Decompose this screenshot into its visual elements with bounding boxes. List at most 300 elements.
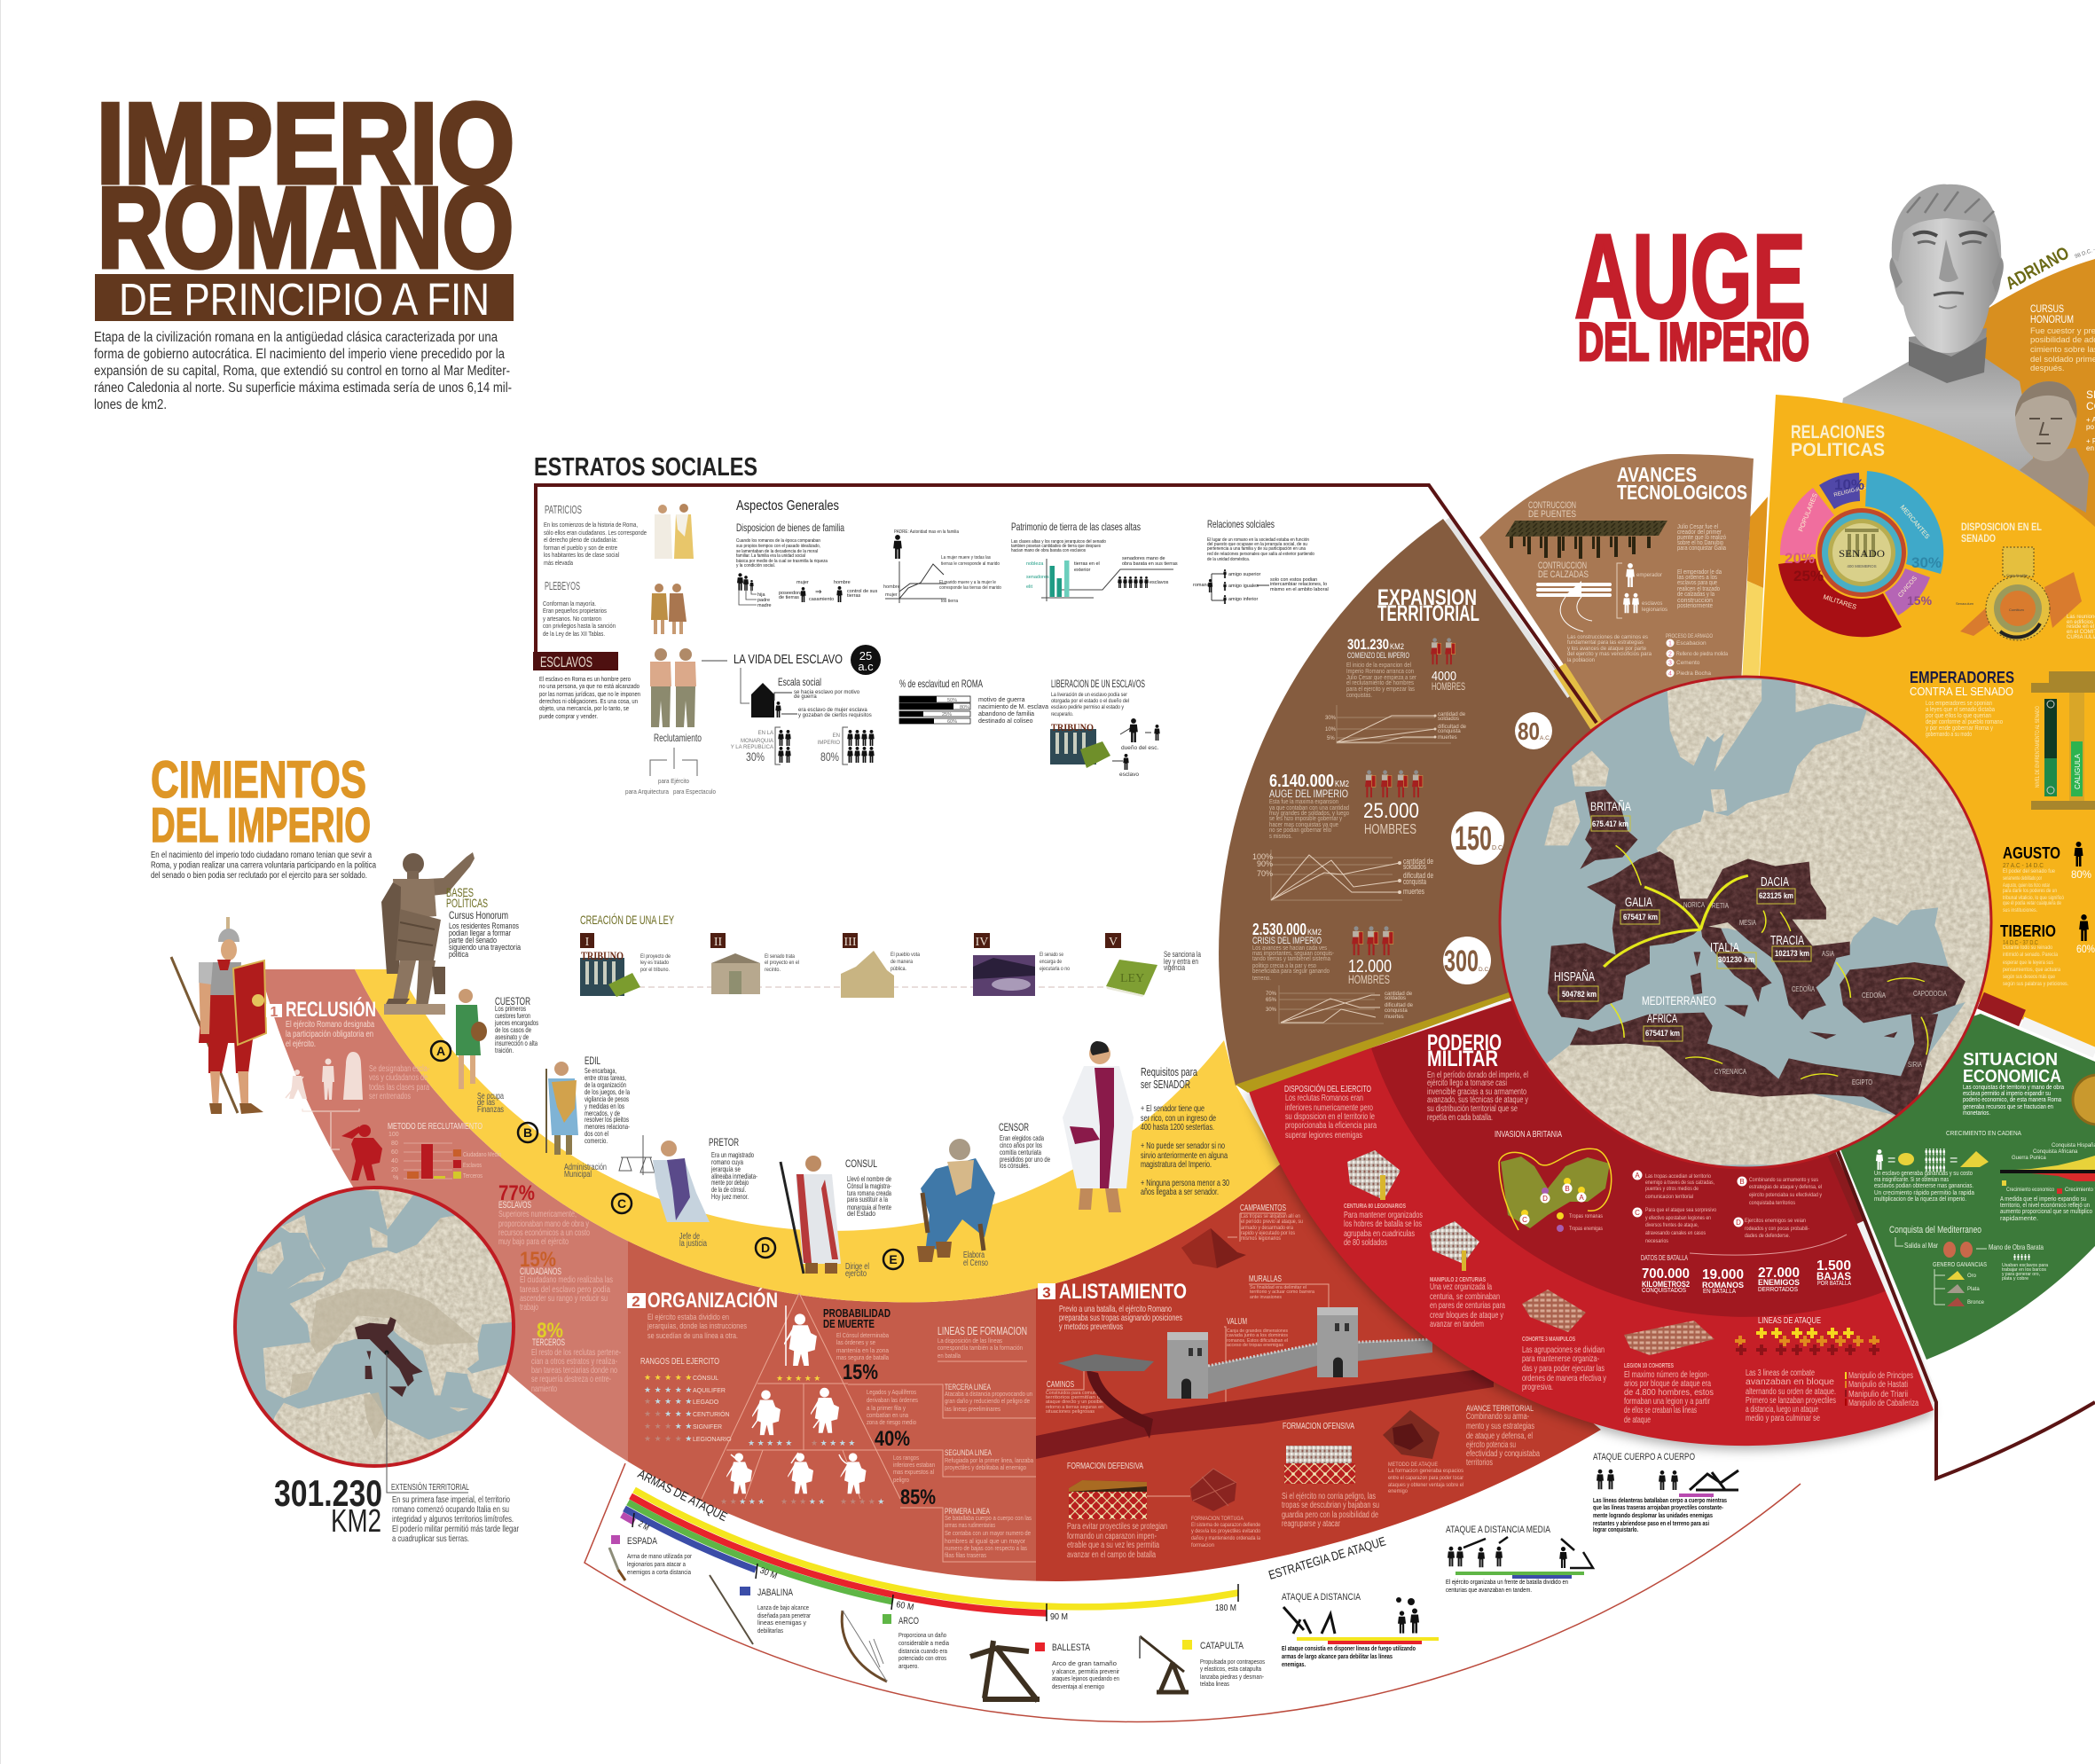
manipulo: centuria, se combinaban <box>1430 1291 1500 1302</box>
avance territorial: efectividad y conquistaba <box>1466 1449 1540 1459</box>
creacion de una ley: vigencia <box>1164 963 1185 972</box>
stage 150 dc: se les hizo imposible gobernar y <box>1269 814 1342 822</box>
legion: de ellos se creaban las lineas <box>1624 1405 1697 1415</box>
pretor: la justicia <box>679 1239 707 1249</box>
plebeyos: y artesanos. No contaron <box>543 615 601 623</box>
manipulo: Una vez organizada la <box>1430 1282 1492 1292</box>
chart: metodo de reclutamiento: 80 <box>391 1141 398 1147</box>
senator: + Ninguna persona menor a 30 <box>1141 1178 1229 1188</box>
formacion defensiva: avanzar en el campo de batalla <box>1067 1550 1156 1560</box>
chart 300 dc: dificultad de <box>1385 1003 1414 1008</box>
ataque a distancia: ATAQUE A DISTANCIA <box>1282 1592 1361 1603</box>
edil: de la organización <box>585 1080 626 1089</box>
jabalina: debilitarlas <box>757 1627 783 1635</box>
formacion defensiva: FORMACION DEFENSIVA <box>1067 1462 1143 1471</box>
disposicion de bienes: sus propios tiempos con el pasado idealizado, <box>736 544 820 549</box>
patricios: el derecho pleno de ciudadanía: <box>544 536 617 544</box>
chart: padre autoridad: tierras le corresponde al marido <box>941 561 1000 567</box>
formacion ofensiva <box>1282 1410 1463 1529</box>
manipulo: MANIPULO 2 CENTURIAS <box>1430 1275 1486 1283</box>
lineas de formacion: Atacaba a distancia propovocando un <box>945 1390 1032 1398</box>
proceso de armado: PROCESO DE ARMADO <box>1666 633 1713 639</box>
heading situacion: esclava permitio al imperio expandir su <box>1963 1091 2051 1097</box>
donut: senado composition: RELIGIOSOS <box>1833 485 1866 498</box>
heading avances: TECNOLOGICOS <box>1617 481 1747 504</box>
disposicion del ejercito: DISPOSICIÓN DEL EJERCITO <box>1284 1083 1371 1094</box>
lineas de formacion: hombres al igual que un mayor <box>945 1537 1025 1545</box>
legion: El maximo número de legion- <box>1624 1369 1709 1380</box>
donut: senado composition: MERCANTES <box>1898 504 1932 540</box>
range ticks <box>632 1513 1238 1622</box>
pyramid of ranks <box>702 1293 900 1507</box>
puentes: Julio Cesar fue el <box>1677 524 1718 530</box>
invasion a britania: INVASION A BRITANIA <box>1495 1130 1562 1140</box>
stage 300 dc: tando tierras y tambienel sistema <box>1252 956 1330 962</box>
extension territorial text: EXTENSIÓN TERRITORIAL <box>391 1481 469 1493</box>
cuestor: Los primeros <box>495 1004 526 1013</box>
espada: enemigos a corta distancia <box>627 1568 692 1576</box>
arco: ARCO <box>898 1616 919 1627</box>
creacion de una ley: El senado trata <box>765 953 795 960</box>
ataque a distancia media: centurias que avanzaban en tandem. <box>1446 1586 1532 1594</box>
main map of the empire <box>1499 676 1992 1169</box>
donut: senado composition: 30% <box>1911 554 1942 571</box>
arco: distancia cuando era <box>898 1647 948 1655</box>
rangos del ejercito: ★★★★★ <box>644 1410 695 1419</box>
edil: comercio. <box>585 1136 608 1145</box>
invasion a britania: Tropas enemigas <box>1569 1226 1604 1232</box>
stat: 301.230 km2: 301.230 <box>274 1472 382 1514</box>
rangos del ejercito: AQUILIFER <box>693 1388 726 1394</box>
patricios: En los comienzos de la historia de Roma, <box>544 521 638 529</box>
tiberio: 14 D.C - 37 D.C <box>2003 940 2038 946</box>
patricios <box>544 503 647 567</box>
formacion defensiva: Para evitar proyectiles se protegian <box>1067 1522 1167 1532</box>
probabilidad de muerte: mas segura de batalla <box>836 1353 890 1361</box>
wheel sector: expansion territorial <box>1219 519 1746 1086</box>
puentes <box>1505 500 1726 559</box>
cuestor: jueces encargados <box>494 1018 538 1027</box>
range ticks: 60 M <box>895 1600 914 1612</box>
stage 150 dc <box>1269 770 1423 840</box>
senator: ser SENADOR <box>1141 1078 1190 1091</box>
disposicion de bienes: tierras <box>847 593 861 599</box>
liberacion de un esclavo: LIBERACION DE UN ESCLAVOS <box>1051 678 1145 690</box>
chart: padre autoridad: La mujer muere y todas las <box>941 555 991 561</box>
chart: growth: Guerra Punica <box>2012 1156 2046 1161</box>
crecimiento en cadena: era insignificante. Si se obtenian mas <box>1874 1177 1949 1183</box>
esclavos text <box>539 675 640 720</box>
formacion ofensiva: reagruparse y atacar <box>1282 1519 1340 1529</box>
panel: cimientos del imperio <box>151 751 1657 1614</box>
proceso de armado: Piedra Bocha <box>1676 670 1711 677</box>
stat 77: proporcionaban mano de obra y <box>498 1219 590 1229</box>
proceso de armado <box>1567 633 1728 678</box>
emperadores contra el senado: a leyes que el senado dictaba <box>1926 707 1995 713</box>
formacion ofensiva: enemigo <box>1388 1489 1408 1494</box>
jabalina: lineas enemigas y <box>757 1619 806 1627</box>
bases politicas: POLÍTICAS <box>446 896 488 910</box>
consul <box>781 1156 891 1279</box>
section 1: reclusion <box>235 997 621 1544</box>
relaciones sociales: amigo iguales <box>1228 584 1259 589</box>
disposicion de bienes: básica por medio de la cual se trasmitía la riqueza <box>736 559 828 564</box>
formacion ofensiva: FORMACION OFENSIVA <box>1283 1422 1354 1431</box>
stage 150 dc: Esta fue la maxima expansion <box>1269 797 1338 805</box>
muralla valum caminos labels: romanos. Estos dificultaban el <box>1227 1338 1288 1344</box>
avance territorial: ejército potencia su <box>1466 1440 1516 1450</box>
heading organizacion: 2 <box>632 1293 640 1310</box>
plebeyos <box>543 579 616 638</box>
invasion a britania: rodeados y con pocas probabili- <box>1745 1226 1809 1232</box>
stage 300 dc: terreno. <box>1252 976 1271 982</box>
avance territorial: AVANCE TERRITORIAL <box>1466 1404 1534 1414</box>
heading armas de ataque: ARMAS DE ATAQUE <box>636 1466 730 1524</box>
tiberio <box>2000 914 2095 987</box>
formacion ofensiva: guardia pero con la posibilidad de <box>1282 1510 1378 1520</box>
muralla valum caminos labels: territorio y actuar como barrera <box>1250 1290 1315 1295</box>
creacion de una ley: El pueblo vota <box>891 952 920 958</box>
creacion de una ley: por el tribuno. <box>640 967 670 973</box>
relaciones sociales <box>1193 518 1329 604</box>
lineas de formacion: numero de bajas con respecto a las <box>945 1544 1027 1552</box>
muralla valum caminos labels: retorno a tierras seguras en <box>1046 1405 1103 1410</box>
puentes: CONTRUCCION <box>1528 500 1576 511</box>
lineas de ataque <box>1735 1316 1918 1423</box>
stat 15 <box>520 1248 613 1313</box>
pyramid of ranks: ★★★★★ <box>811 1439 858 1448</box>
datos de batalla: 27.000 <box>1758 1266 1800 1281</box>
disposicion de bienes: y la condición social. <box>736 563 775 568</box>
stage 150 dc: 25.000 <box>1363 799 1419 823</box>
stat 77: recursos económicos a un costo <box>498 1227 590 1238</box>
column gauge: CALIGULA <box>2074 753 2082 789</box>
stat 8: cian a otros estratos y realiza- <box>531 1356 617 1367</box>
disposicion de bienes: casamiento <box>809 597 834 602</box>
stage 300 dc: Los avances se hacian cada ves <box>1252 945 1327 952</box>
wheel wedge: orange strip <box>1742 497 1768 683</box>
stage 150 dc: HOMBRES <box>1364 822 1416 837</box>
ballesta: desventaja al enemigo <box>1052 1682 1104 1690</box>
heading situacion: SITUACION <box>1963 1050 2058 1070</box>
intro text <box>151 851 376 881</box>
stat 15: ascender su rango y reducir su <box>520 1293 608 1304</box>
disposicion de bienes: mujer <box>796 580 809 585</box>
calzadas: El emperador le da <box>1677 569 1722 576</box>
liberacion de un esclavo: esclavo pedirle permiso al estado y <box>1051 704 1125 710</box>
relaciones sociales: mismo en el ambito laboral <box>1270 587 1329 592</box>
province labels: TRACIA <box>1770 933 1804 948</box>
censor <box>917 1121 1050 1268</box>
stage 300 dc <box>1252 921 1393 986</box>
stage 300 dc: 12.000 <box>1348 957 1392 976</box>
disposicion de bienes: ⇒ <box>815 587 822 596</box>
censor: presididos por uno de <box>1000 1155 1050 1164</box>
panel: armas de ataque <box>585 1463 1801 1721</box>
donut: senado composition: POPULARES <box>1797 492 1819 533</box>
esclavos text: no una persona, ya que no está alcanzado <box>539 682 639 690</box>
badge 300 dc <box>1443 937 1491 984</box>
creacion de una ley: ley y entra en <box>1164 957 1198 966</box>
chart 150 dc: muertes <box>1403 887 1424 896</box>
chart 300 dc: 65% <box>1266 998 1277 1003</box>
cohorte: COHORTE 3 MANIPULOS <box>1522 1335 1575 1343</box>
heading poderio militar: MILITAR <box>1427 1047 1498 1071</box>
disposicion del ejercito: Los reclutas Romanos eran <box>1285 1093 1363 1103</box>
escala social: y gozaban de ciertos requisitos <box>798 713 872 718</box>
invasion a britania: C <box>1635 1209 1640 1217</box>
disposicion del ejercito <box>1284 1083 1377 1141</box>
conquista del mediterraneo: GENERO GANANCIAS <box>1933 1262 1987 1268</box>
invasion a britania: comunicacion territorial <box>1645 1194 1693 1200</box>
poderio text: su distribución territorial que se <box>1427 1104 1518 1114</box>
donut: senado composition: CIVICOS <box>1897 575 1918 599</box>
stage 150 dc: no se podian gobernar ello <box>1269 826 1331 834</box>
invasion a britania: diversos frentes de ataque, <box>1645 1222 1699 1228</box>
creacion de una ley: de manera <box>891 959 913 965</box>
proceso de armado: 1 <box>1668 640 1672 647</box>
cuestor: de los casos de <box>495 1025 531 1034</box>
chart: patrimonio de tierra: Las clases altas y los rangos jerarquicos del senado <box>1011 539 1106 545</box>
esclavos text: derechos ni obligaciones. Es una cosa, un <box>539 697 638 705</box>
heading relaciones: POLITICAS <box>1791 440 1885 460</box>
badge 80 ac: 80 <box>1518 717 1540 745</box>
avance territorial: territorios <box>1466 1458 1493 1468</box>
cuestor <box>456 989 538 1115</box>
catapulta: telaba lineas <box>1200 1680 1229 1688</box>
conquista del mediterraneo: Bronce <box>1967 1300 1985 1305</box>
senator: + El senador tiene que <box>1141 1103 1204 1114</box>
province labels: HISPAÑA <box>1554 969 1595 984</box>
marker e: E <box>889 1252 898 1266</box>
lineas de formacion: LINEAS DE FORMACION <box>938 1324 1027 1337</box>
province labels: 102173 km <box>1775 949 1809 958</box>
cohorte: progresiva. <box>1522 1382 1553 1392</box>
lineas de formacion: gran daño y reduciendo el peligro de <box>945 1397 1030 1405</box>
ataque a distancia media: ATAQUE A DISTANCIA MEDIA <box>1446 1525 1551 1535</box>
chart: patrimonio de tierra: obra barata en sus tierras <box>1122 561 1178 567</box>
muralla valum caminos labels: VALUM <box>1227 1317 1247 1327</box>
bases politicas: BASES <box>446 885 474 899</box>
muralla valum caminos labels: Construidos para comunicar <box>1046 1391 1103 1396</box>
donut: senado composition: 10% <box>1834 476 1864 493</box>
catapulta: lanzaba piedras y desman- <box>1200 1673 1264 1681</box>
creacion de una ley <box>580 913 1201 998</box>
chart 150 dc: 70% <box>1257 869 1273 878</box>
datos de batalla: CONQUISTADOS <box>1642 1288 1686 1294</box>
formacion ofensiva: tropas se descubrian y bajaban su <box>1282 1501 1379 1510</box>
creacion de una ley: encarga de <box>1040 959 1062 965</box>
plebeyos: con privilegios hasta la sanción <box>543 622 616 630</box>
escala social: era esclavo de mujer esclava <box>798 708 867 713</box>
heading poderio militar <box>1427 1031 1502 1071</box>
consul: Cónsul la magistra- <box>847 1181 891 1190</box>
formacion defensiva: daños y manteniendo ordenada la <box>1191 1536 1261 1541</box>
edil: dos con el <box>585 1129 608 1138</box>
heading alistamiento: 3 <box>1042 1284 1051 1301</box>
escala social <box>731 668 875 764</box>
formacion defensiva: etrable que a su vez les permitia <box>1067 1541 1159 1550</box>
proceso de armado: Las construcciones de caminos es <box>1567 634 1649 640</box>
calzadas: esclavos <box>1642 601 1662 607</box>
lineas de formacion: La disposición de las líneas <box>938 1337 1002 1345</box>
edil: mercados, y de <box>585 1109 620 1117</box>
heading estrategia de ataque: ESTRATEGIA DE ATAQUE <box>1267 1533 1387 1582</box>
plebeyos: de la Ley de las XII Tablas. <box>543 630 605 638</box>
chart: padre autoridad: los tierra <box>941 599 958 604</box>
formacion defensiva: formando un caparazon impen- <box>1067 1532 1157 1541</box>
extension territorial text <box>391 1481 519 1544</box>
extension territorial text: integridad y algunos territorios limítrofes. <box>392 1514 514 1525</box>
poderio militar content <box>1284 1031 1918 1425</box>
reclusion text: la participación obligatoria en <box>286 1030 373 1039</box>
adriano text: CURSUS <box>2030 302 2064 315</box>
escala social: Escala social <box>778 676 821 688</box>
province labels: 504782 km <box>1562 990 1597 999</box>
donut: senado composition: SENADO <box>1839 547 1885 560</box>
chart 150 dc: cantidad de <box>1403 857 1433 866</box>
stage 300 dc: mas importantes, seguian conquis- <box>1252 951 1335 957</box>
muralla valum caminos labels: ataque directo y un posible <box>1046 1399 1103 1405</box>
edil: menores relaciona- <box>585 1122 630 1131</box>
relaciones sociales: del puesto que ocupase en la jerarquía social, de su <box>1207 542 1307 547</box>
consul: ejercito <box>845 1269 867 1279</box>
stage 150 dc: 6.140.000 <box>1269 772 1334 791</box>
intro paragraph: forma de gobierno autocrática. El nacimiento del imperio viene precedido por la <box>94 347 505 362</box>
cuestor: CUESTOR <box>495 995 530 1007</box>
heading expansion: EXPANSION <box>1377 585 1477 610</box>
consul: del Estado <box>847 1209 875 1218</box>
stat 77 <box>498 1181 590 1247</box>
chart: patrimonio de tierra: elit <box>1026 584 1033 590</box>
title: imperio romano <box>97 80 514 292</box>
formacion defensiva: y desvía los proyectiles evitando <box>1191 1529 1261 1534</box>
reclutamiento tree: Reclutamiento <box>654 732 702 744</box>
espada: Arma de mano utilizada por <box>627 1552 692 1560</box>
patricios: PATRICIOS <box>545 503 582 516</box>
cohorte: das y para poder ejecutar las <box>1522 1363 1605 1374</box>
stage 80 ac: COMIENZO DEL IMPERIO <box>1347 651 1409 660</box>
agusto: 27 A.C - 14 D.C <box>2003 863 2044 869</box>
lineas de formacion: armas mas rudimentarias <box>945 1521 995 1529</box>
datos de batalla: KILOMETROS2 <box>1642 1280 1690 1289</box>
donut: senado composition: 20% <box>1785 550 1815 567</box>
legion: de ataque <box>1624 1415 1651 1425</box>
icon: tent <box>1181 1228 1246 1268</box>
liberacion de un esclavo <box>1050 678 1160 778</box>
ataque cuerpo a cuerpo: ATAQUE CUERPO A CUERPO <box>1593 1452 1695 1462</box>
extension territorial text: romano comenzó ocupando Italia en su <box>392 1504 509 1515</box>
frame lines <box>536 485 2095 1478</box>
muralla valum caminos labels: Canja de grandes dimensiones <box>1227 1329 1288 1334</box>
reclutamiento tree: para Espectaculo <box>673 788 716 796</box>
pretor: PRETOR <box>709 1136 739 1149</box>
heading situacion: ECONOMICA <box>1963 1067 2061 1086</box>
consul: para sustituir a la <box>847 1195 888 1203</box>
escala social: Y LA REPUBLICA <box>731 745 773 750</box>
icon: esclavos figures <box>650 648 696 727</box>
bases politicas: siguiendo una trayectoria <box>449 943 521 952</box>
chart: patrimonio de tierra: senadores <box>1026 575 1049 580</box>
consul: Dirige el <box>845 1262 869 1272</box>
stat 8 <box>531 1319 621 1394</box>
probabilidad de muerte: El Cónsul determinaba <box>836 1331 890 1339</box>
edil: resolver los pleitos <box>585 1115 629 1124</box>
yellow political career band <box>355 969 1281 1303</box>
ataque cuerpo a cuerpo: lograr conquistarlo. <box>1593 1525 1638 1533</box>
censor: cinco años por los <box>1000 1141 1042 1149</box>
province labels: CYRENAICA <box>1714 1068 1747 1076</box>
chart: metodo de reclutamiento: 20 <box>391 1167 398 1173</box>
ataque cuerpo a cuerpo: mente logrando desplomar las unidades enemigas <box>1593 1511 1713 1519</box>
stage 80 ac: Imperio Romano arranca con <box>1346 667 1414 675</box>
liberacion de un esclavo: otorgada por el estado o el dueño del <box>1051 698 1129 704</box>
probabilidad de muerte: combatían en una <box>867 1411 909 1419</box>
stage 80 ac: el reclutamiento de hombres <box>1346 678 1414 686</box>
pretor: jerarquía se <box>710 1164 741 1173</box>
consul: tura romana creada <box>847 1188 891 1197</box>
datos de batalla: DATOS DE BATALLA <box>1641 1254 1688 1262</box>
probabilidad de muerte: DE MUERTE <box>823 1317 875 1330</box>
relaciones sociales: amigo superior <box>1228 572 1261 577</box>
lineas de ataque: a distancia, luego un ataque <box>1746 1405 1818 1415</box>
muralla valum caminos labels: cavada junto a los dominios <box>1227 1333 1288 1338</box>
edil: EDIL <box>585 1054 600 1067</box>
invasion a britania <box>1495 1130 1847 1255</box>
conquista del mediterraneo: Conquista del Mediterraneo <box>1889 1225 1981 1235</box>
stat 77: ESCLAVOS <box>498 1200 531 1211</box>
creacion de una ley: Se sanciona la <box>1164 950 1201 959</box>
disposicion en el senado: DISPOSICION EN EL <box>1961 521 2042 533</box>
proceso de armado: del ejercito y mas vencioficios para <box>1567 651 1652 657</box>
muralla valum caminos labels: MURALLAS <box>1249 1274 1282 1284</box>
lineas de formacion <box>848 1324 1036 1562</box>
escala social: EN <box>833 733 840 739</box>
lineas de formacion: Refugiada por la primer linea, lanzaba <box>945 1456 1034 1464</box>
heading reclusion: RECLUSIÓN <box>286 997 376 1022</box>
senator <box>1063 1041 1229 1212</box>
heading expansion: TERRITORIAL <box>1377 601 1479 626</box>
legion: LEGION 10 COHORTES <box>1624 1361 1674 1369</box>
agusto: El poder del senado fue <box>2003 868 2055 874</box>
disposicion en el senado: SENADO <box>1961 532 1996 545</box>
centuria: los hobres de batalla se los <box>1344 1219 1422 1229</box>
disposicion en el senado: reside en el <box>2067 624 2094 630</box>
arco: potenciado con otros <box>898 1654 946 1662</box>
chart: padre autoridad <box>883 529 1001 604</box>
agusto: Augusto, quien los hizo votar <box>2003 882 2051 889</box>
alistamiento text <box>1059 1304 1182 1332</box>
muralla valum caminos labels: ante invasiones <box>1250 1295 1282 1300</box>
lineas de ataque: avanzaban en bloque <box>1746 1377 1834 1387</box>
ataque cuerpo a cuerpo: restantes y abriendose paso en el terreno para asi <box>1593 1519 1709 1527</box>
escala social: de guerra <box>794 694 817 700</box>
agusto: seriamente debilitado por <box>2003 875 2042 882</box>
invasion a britania: dades de defenderse. <box>1745 1233 1790 1239</box>
emperadores contra el senado <box>1910 669 2014 738</box>
censor: Elabora <box>963 1250 985 1260</box>
panel: estratos sociales <box>533 453 1329 796</box>
patricios: sólo ellos eran ciudadanos. Les corresponde <box>544 529 647 537</box>
formacion ofensiva: entre el caparazon para poder tocar <box>1388 1476 1463 1481</box>
cohorte: Las agrupaciones se dividian <box>1522 1345 1605 1355</box>
creacion de una ley: I <box>585 936 590 949</box>
bars: porcentaje de esclavitud: 25% <box>942 712 952 717</box>
reclutamiento tree: para Ejército <box>658 777 689 785</box>
intro paragraph: lones de km2. <box>94 397 167 412</box>
stage 80 ac: KM2 <box>1390 642 1404 651</box>
intro text: En el nacimiento del imperio todo ciudadano romano tenian que sevir a <box>151 851 372 860</box>
